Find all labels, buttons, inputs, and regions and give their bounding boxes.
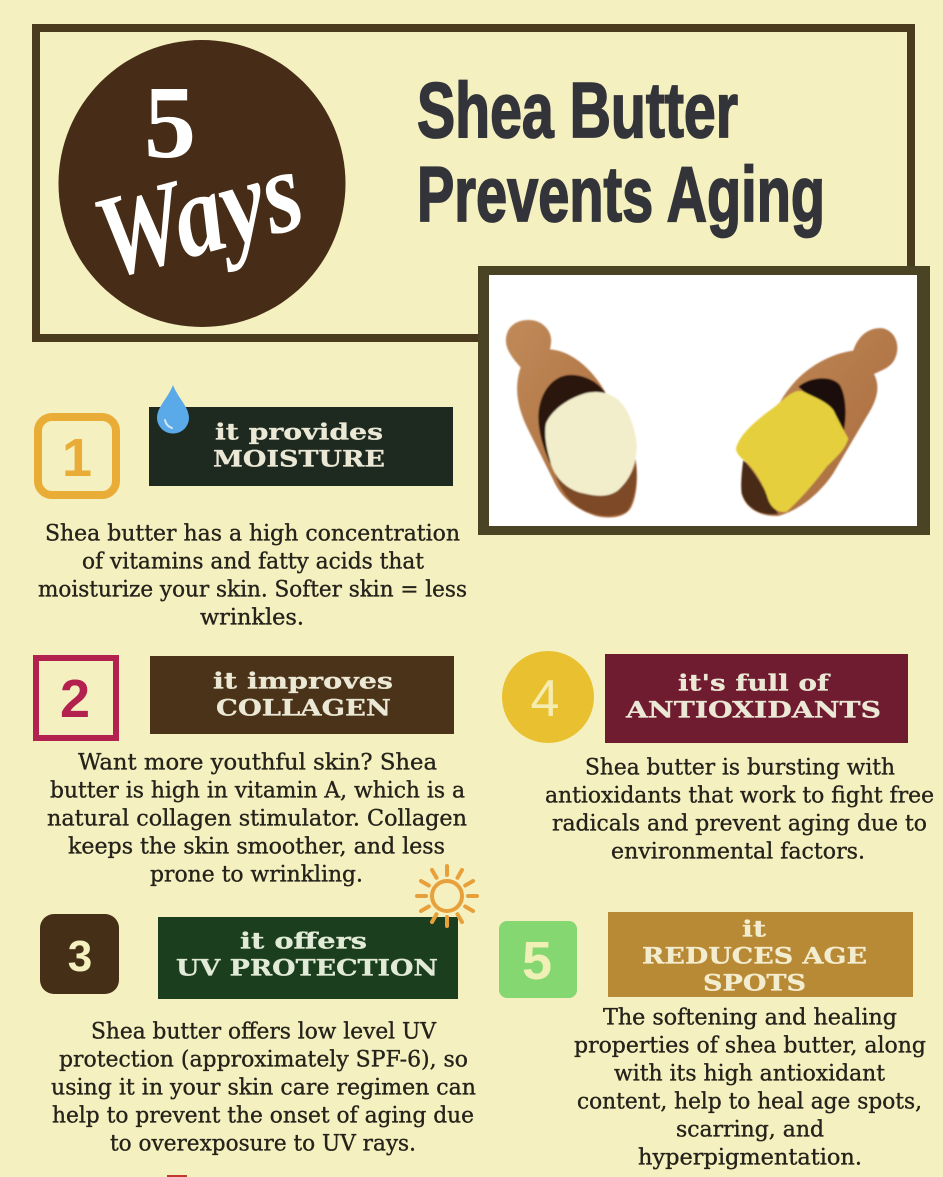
body text 1: moisturize your skin. Softer skin = less — [38, 578, 467, 603]
body text 3: to overexposure to UV rays. — [110, 1132, 416, 1157]
body text 4: radicals and prevent aging due to — [552, 812, 927, 837]
left scoop — [506, 320, 637, 517]
badge: 5 Ways: 5 — [144, 65, 196, 180]
body text 1: wrinkles. — [200, 606, 304, 631]
body text 1: Shea butter has a high concentration — [45, 522, 460, 547]
body text 2 — [47, 751, 467, 888]
number badge 2: 2 — [60, 669, 90, 729]
number badge 5 — [499, 921, 577, 998]
body text 5: content, help to heal age spots, — [577, 1090, 922, 1115]
title — [417, 66, 825, 238]
right scoop — [736, 328, 897, 516]
banner 2 — [150, 656, 454, 734]
body text 4: environmental factors. — [611, 840, 865, 865]
banner 4: it's full of — [678, 671, 831, 697]
body text 4: Shea butter is bursting with — [585, 756, 895, 781]
banner 2: COLLAGEN — [216, 696, 391, 722]
number badge 4: 4 — [531, 670, 559, 728]
body text 3: help to prevent the onset of aging due — [52, 1104, 474, 1129]
body text 3: using it in your skin care regimen can — [51, 1076, 476, 1101]
body text 2: butter is high in vitamin A, which is a — [50, 779, 465, 804]
photo: two wooden scoops of shea butter — [478, 266, 930, 535]
banner 3: it offers — [240, 929, 367, 955]
title: Shea Butter — [417, 66, 738, 154]
section 1: moisture — [38, 385, 467, 631]
body text 3: Shea butter offers low level UV — [91, 1020, 437, 1045]
number badge 5: 5 — [522, 931, 552, 991]
body text 2: natural collagen stimulator. Collagen — [47, 807, 467, 832]
number badge 4 — [502, 651, 594, 743]
banner 1: MOISTURE — [213, 447, 385, 473]
banner 5: SPOTS — [703, 971, 806, 997]
body text 5: The softening and healing — [603, 1006, 897, 1031]
banner 1 — [149, 407, 453, 486]
icon: water drop — [157, 385, 189, 434]
banner 4: ANTIOXIDANTS — [625, 698, 881, 724]
section 4: antioxidants — [502, 651, 934, 865]
header panel — [36, 28, 911, 338]
section 5: age spots — [499, 912, 926, 1171]
body text 1 — [38, 522, 467, 631]
body text 5: scarring, and — [676, 1118, 824, 1143]
section 3: UV protection — [40, 866, 477, 1157]
banner 5 — [608, 912, 913, 997]
number badge 1: 1 — [62, 428, 92, 488]
body text 4: antioxidants that work to fight free — [545, 784, 934, 809]
icon: sun — [417, 866, 477, 926]
body text 4 — [545, 756, 934, 865]
body text 2: Want more youthful skin? Shea — [78, 751, 437, 776]
section 2: collagen — [36, 656, 467, 888]
body text 3: protection (approximately SPF-6), so — [59, 1048, 468, 1073]
badge: 5 Ways: Ways — [81, 124, 316, 304]
banner 1: it provides — [215, 420, 383, 446]
body text 5 — [574, 1006, 926, 1171]
banner 5: REDUCES AGE — [642, 944, 867, 970]
badge: 5 Ways — [58, 40, 346, 327]
banner 3 — [158, 917, 458, 999]
number badge 1 — [38, 417, 116, 495]
body text 5: hyperpigmentation. — [638, 1146, 862, 1171]
body text 1: of vitamins and fatty acids that — [82, 550, 424, 575]
banner 5: it — [742, 917, 767, 943]
body text 3 — [51, 1020, 476, 1157]
number badge 3: 3 — [68, 932, 92, 981]
body text 2: prone to wrinkling. — [150, 863, 363, 888]
banner 2: it improves — [213, 669, 393, 695]
banner 4 — [605, 654, 908, 743]
number badge 2 — [36, 658, 116, 738]
body text 2: keeps the skin smoother, and less — [68, 835, 445, 860]
number badge 3 — [40, 914, 119, 994]
body text 5: properties of shea butter, along — [574, 1034, 926, 1059]
banner 3: UV PROTECTION — [176, 956, 438, 982]
body text 5: with its high antioxidant — [614, 1062, 885, 1087]
cropped red icon at bottom edge — [167, 1175, 187, 1177]
